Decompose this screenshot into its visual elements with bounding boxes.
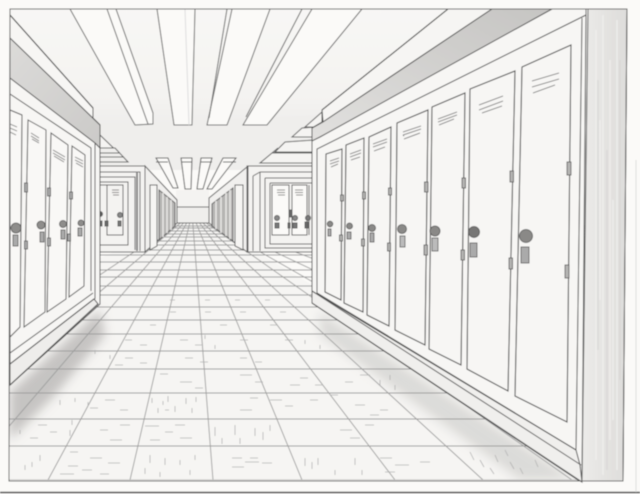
right locker knobs and handles bbox=[327, 221, 532, 263]
ceiling lights, near row bbox=[70, 9, 362, 125]
left wall surface and upper box bbox=[10, 15, 100, 385]
right wall surface bbox=[312, 9, 586, 482]
near right pillar bbox=[582, 9, 627, 481]
right locker hinges bbox=[340, 162, 571, 278]
right wall baseboard bbox=[312, 291, 582, 482]
right locker wall bbox=[312, 9, 586, 482]
right locker vents bbox=[330, 73, 559, 167]
right side ceiling steps bbox=[260, 112, 322, 163]
ceiling lights, far row bbox=[156, 158, 236, 189]
tile grid bbox=[9, 223, 577, 481]
floor with tiles bbox=[9, 223, 577, 481]
left wall baseboard bbox=[10, 293, 98, 385]
ceiling bbox=[10, 9, 625, 170]
wall shadows on floor bbox=[10, 310, 575, 480]
left lockers bbox=[10, 110, 85, 337]
far hallway wall bbox=[176, 190, 209, 223]
far left locker bank bbox=[98, 166, 177, 252]
right lockers bbox=[325, 45, 571, 422]
left side ceiling steps bbox=[100, 135, 128, 162]
left locker knobs and hinges bbox=[11, 183, 84, 249]
tile speckle bbox=[20, 300, 538, 477]
far right locker bank bbox=[209, 166, 312, 252]
left locker wall bbox=[10, 15, 100, 385]
